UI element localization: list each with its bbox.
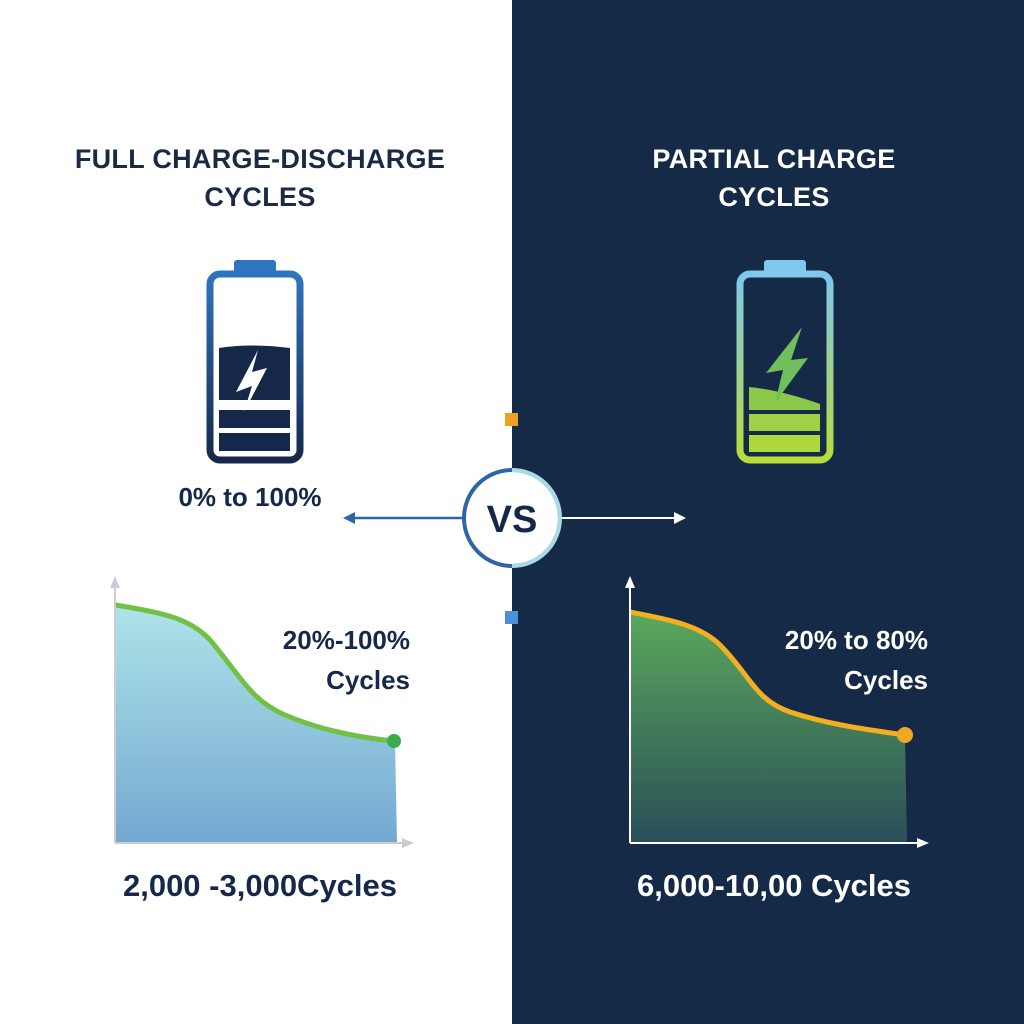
arrow: right — [562, 512, 686, 524]
chart: right — [625, 576, 929, 848]
markers — [505, 413, 518, 426]
title: partial cycles: PARTIAL CHARGE — [652, 144, 896, 174]
title: full cycles: FULL CHARGE-DISCHARGE — [75, 144, 445, 174]
label: left cycles count: 2,000 -3,000Cycles — [123, 868, 397, 903]
title: partial cycles: CYCLES — [718, 182, 830, 212]
title: full cycles: CYCLES — [204, 182, 316, 212]
label: 20%-100% cycles: 20%-100% — [283, 625, 410, 655]
vs circle: VS — [487, 499, 537, 541]
dark right background — [512, 0, 1024, 1024]
title: partial cycles — [652, 144, 896, 212]
label: 20%-100% cycles: Cycles — [326, 665, 410, 695]
label: 20%-100% cycles — [283, 625, 410, 695]
label: right cycles count: 6,000-10,00 Cycles — [637, 868, 911, 903]
label: 20% to 80% cycles: Cycles — [844, 665, 928, 695]
label: 20% to 80% cycles: 20% to 80% — [785, 625, 928, 655]
vs circle — [464, 470, 560, 566]
arrow: left — [343, 512, 465, 524]
chart: left — [110, 576, 414, 848]
icon: left battery — [210, 260, 300, 460]
title: full cycles — [75, 144, 445, 212]
label: 20% to 80% cycles — [785, 625, 928, 695]
label: 0% to 100%: 0% to 100% — [178, 482, 322, 512]
icon: right battery — [740, 260, 830, 460]
